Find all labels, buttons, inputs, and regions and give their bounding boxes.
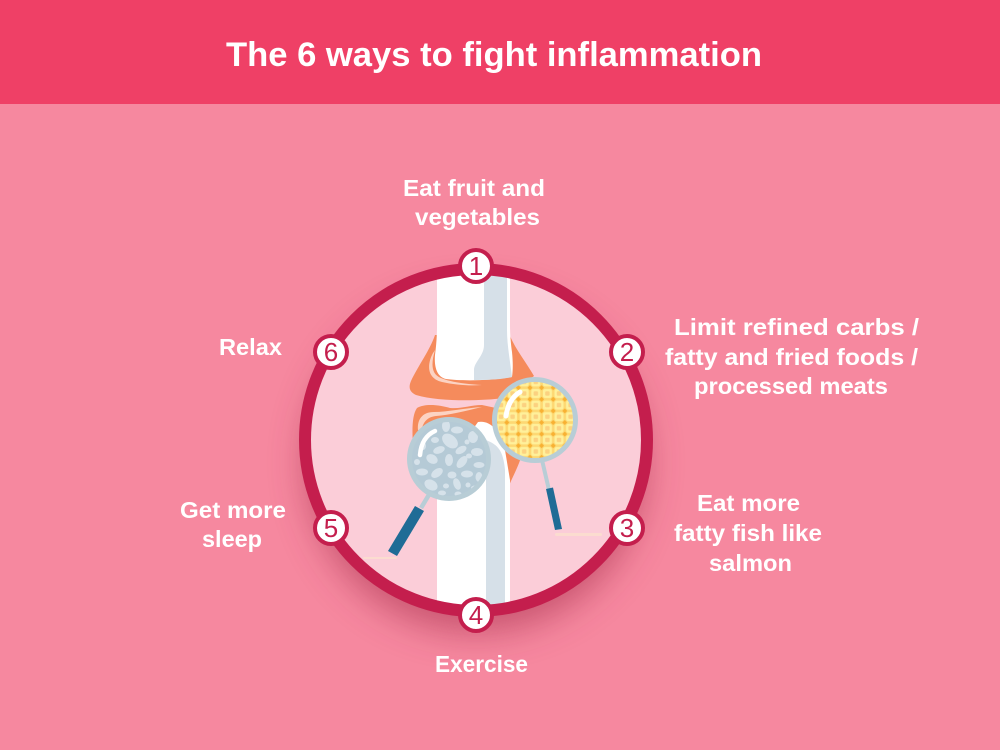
glint — [420, 431, 435, 455]
badge 5 — [315, 512, 347, 544]
lens — [494, 380, 576, 460]
magnifier: yellow cells — [494, 380, 576, 530]
label 3: fatty fish like — [674, 520, 822, 546]
lens — [410, 420, 488, 498]
joint diagram — [306, 266, 646, 612]
label 3: Eat more — [697, 490, 800, 516]
label 5: sleep — [202, 526, 262, 552]
label 6: Relax — [219, 334, 282, 360]
badge 3: 3 — [620, 513, 634, 543]
badge 6 — [315, 336, 347, 368]
magnifier: grey tissue — [388, 420, 488, 556]
illustration of knee joint — [410, 266, 534, 612]
glint — [506, 392, 520, 416]
label 1 — [403, 175, 545, 230]
header band — [0, 0, 1000, 104]
badge 2 — [611, 336, 643, 368]
label 1: Eat fruit and — [403, 175, 545, 201]
badge 6: 6 — [324, 337, 338, 367]
label 2 — [665, 314, 920, 399]
label 5 — [180, 497, 286, 552]
badge 2: 2 — [620, 337, 634, 367]
badge 5: 5 — [324, 513, 338, 543]
lower cartilage — [412, 405, 524, 486]
faint streak left — [363, 557, 397, 559]
faint streak right — [555, 533, 602, 536]
label 3 — [674, 490, 822, 576]
label 5: Get more — [180, 497, 286, 523]
label 2: Limit refined carbs / — [674, 314, 920, 340]
title: The 6 ways to fight inflammation — [226, 36, 762, 74]
lower bone — [437, 422, 510, 612]
badge 4: 4 — [469, 600, 483, 630]
label 3: salmon — [709, 550, 792, 576]
circle shadow — [306, 292, 646, 632]
handle — [421, 493, 430, 508]
ring — [305, 269, 647, 611]
upper bone — [435, 266, 513, 380]
badge 4 — [460, 599, 492, 631]
disc background — [306, 270, 646, 610]
label 1: vegetables — [415, 204, 540, 230]
upper cartilage — [410, 335, 534, 400]
handle — [542, 460, 549, 490]
label 2: fatty and fried foods / — [665, 344, 919, 370]
label 2: processed meats — [694, 373, 888, 399]
cartilage highlights — [429, 350, 482, 385]
badge 1 — [460, 250, 492, 282]
badge 1: 1 — [469, 251, 483, 281]
badge 3 — [611, 512, 643, 544]
label 4: Exercise — [435, 651, 528, 677]
